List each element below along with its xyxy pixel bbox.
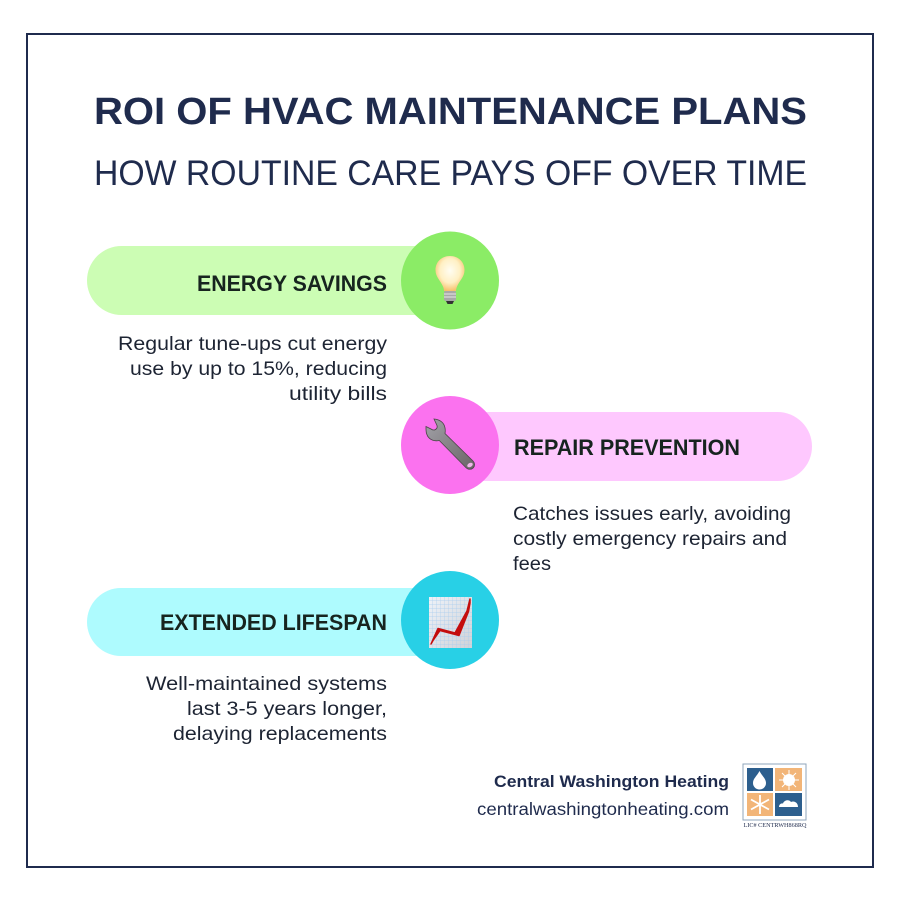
body text: energy savings xyxy=(118,333,387,405)
logo: drop tile xyxy=(747,768,773,791)
body text: extended lifespan: last 3-5 years longer, xyxy=(187,698,387,720)
pill: repair prevention xyxy=(425,412,812,481)
body text: extended lifespan xyxy=(146,673,387,745)
logo xyxy=(743,764,807,829)
title: ROI OF HVAC MAINTENANCE PLANS xyxy=(94,91,807,133)
body text: energy savings: utility bills xyxy=(289,383,387,405)
icon circle: repair prevention xyxy=(401,396,499,494)
panel: extended lifespan xyxy=(87,571,499,745)
body text: repair prevention: Catches issues early, avoiding xyxy=(513,503,791,525)
company name: Central Washington Heating xyxy=(494,772,729,791)
icon: chart xyxy=(429,597,472,648)
pill: extended lifespan xyxy=(87,588,477,656)
pill: energy savings xyxy=(87,246,477,315)
body text: repair prevention: fees xyxy=(513,553,551,575)
body text: energy savings: Regular tune-ups cut energy xyxy=(118,333,387,355)
panel: repair prevention xyxy=(401,396,812,575)
icon circle: energy savings xyxy=(401,232,499,330)
subtitle: HOW ROUTINE CARE PAYS OFF OVER TIME xyxy=(94,154,807,193)
body text: extended lifespan: delaying replacements xyxy=(173,723,387,745)
body text: energy savings: use by up to 15%, reducing xyxy=(130,358,387,380)
icon: wrench xyxy=(426,419,475,469)
logo: cloud tile xyxy=(775,793,802,816)
logo: license text: LIC# CENTRWH868RQ xyxy=(744,823,807,829)
logo: snowflake tile xyxy=(747,793,773,816)
website: centralwashingtonheating.com xyxy=(477,799,729,819)
heading: extended lifespan: EXTENDED LIFESPAN xyxy=(160,610,387,635)
panel: energy savings xyxy=(87,232,499,405)
heading: repair prevention: REPAIR PREVENTION xyxy=(514,435,740,460)
body text: repair prevention xyxy=(513,503,791,575)
icon circle: extended lifespan xyxy=(401,571,499,669)
icon: light bulb xyxy=(436,256,464,304)
body text: repair prevention: costly emergency repairs and xyxy=(513,528,787,550)
body text: extended lifespan: Well-maintained systems xyxy=(146,673,387,695)
heading: energy savings: ENERGY SAVINGS xyxy=(197,271,387,296)
logo: sun tile xyxy=(775,768,802,791)
